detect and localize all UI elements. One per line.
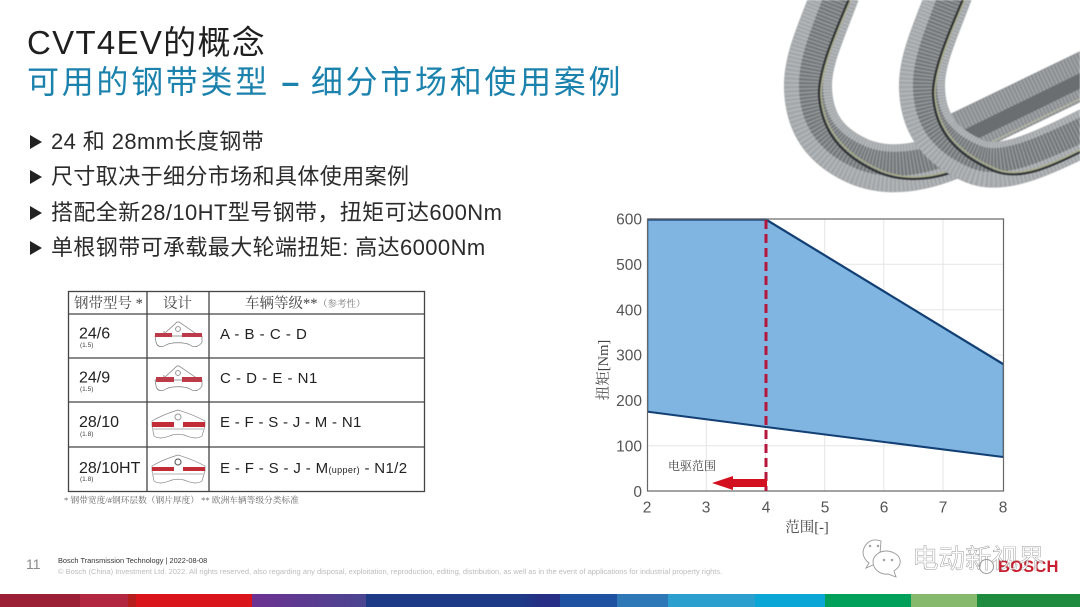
row 24/9: C - D - E - N1 (220, 370, 318, 387)
row 28/10: E - F - S - J - M - N1 (220, 414, 362, 431)
belt: right loop upper strand (945, 72, 1080, 160)
title: CVT4EV的概念 (27, 24, 266, 61)
x axis labels: 7 (939, 500, 947, 516)
bullet list: 24 和 28mm长度钢带 (51, 129, 264, 154)
y axis labels: 300 (616, 348, 642, 364)
x axis labels: 2 (643, 500, 651, 516)
y axis labels: 200 (616, 393, 642, 410)
y axis labels (616, 212, 642, 501)
y axis labels: 600 (616, 212, 642, 228)
row 24/6: (1.5) (80, 342, 93, 349)
footer title: Bosch Transmission Technology | 2022-08-08 (58, 556, 207, 565)
table header: 钢带型号 * (74, 294, 143, 312)
chart upper limit line (648, 220, 1003, 364)
row 24/6: 24/6 (79, 326, 110, 342)
image: CVT steel belts (783, 0, 1080, 193)
x axis labels: 6 (880, 500, 888, 516)
row 24/6 (79, 326, 307, 349)
watermark circle (979, 559, 994, 574)
chart frame (648, 219, 1004, 491)
row 28/10: 28/10 (79, 414, 119, 431)
row 28/10HT (79, 460, 407, 483)
row 24/9 (79, 370, 318, 393)
row 24/9: 24/9 (79, 370, 110, 386)
row 28/10: (1.8) (80, 431, 93, 438)
table grid (68, 291, 424, 492)
chart area: operating range (648, 219, 1003, 457)
bullet 4 (30, 235, 486, 260)
subtitle: 可用的钢带类型 – 细分市场和使用案例 (27, 64, 623, 100)
label: electric drive range: 电驱范围 (668, 458, 716, 473)
y axis title: 扭矩[Nm] (595, 340, 612, 400)
footer colour band (0, 594, 1080, 607)
bullet 3 (30, 200, 502, 225)
chart lower limit line (648, 412, 1003, 457)
bullet list: 单根钢带可承载最大轮端扭矩: 高达6000Nm (51, 235, 486, 260)
x axis title: 范围[-] (785, 518, 829, 536)
bullet list: 搭配全新28/10HT型号钢带，扭矩可达600Nm (51, 200, 502, 225)
table header: 车辆等级** (245, 295, 318, 312)
belt: right loop (922, 0, 1080, 174)
table header: 设计 (163, 295, 192, 312)
bullet list (30, 129, 502, 260)
y axis labels: 100 (616, 438, 642, 456)
table footnote: * 钢带宽度/#钢环层数（钢片厚度） ** 欧洲车辆等级分类标准 (64, 494, 299, 505)
logo: BOSCH: BOSCH (998, 558, 1059, 576)
bullet 2 (30, 164, 409, 189)
y axis labels: 400 (616, 302, 642, 320)
row 28/10HT: E - F - S - J - M(upper) - N1/2 (220, 460, 407, 477)
row 24/6: A - B - C - D (220, 326, 307, 343)
y axis labels: 0 (633, 484, 642, 501)
icon: belt section 28/10 (152, 410, 205, 438)
row 24/9: (1.5) (80, 386, 93, 393)
x axis labels (643, 500, 1007, 516)
watermark text: 电动新视界 (912, 544, 1044, 574)
bullet list: 尺寸取决于细分市场和具体使用案例 (51, 164, 409, 189)
row 28/10 (79, 414, 362, 438)
bullet 1 (30, 129, 264, 154)
belt: left loop (808, 0, 950, 179)
chart red dashed limit (764, 220, 768, 491)
row 28/10HT: 28/10HT (79, 460, 141, 477)
icon: belt section 28/10HT (152, 455, 205, 483)
x axis labels: 5 (821, 500, 829, 516)
y axis labels: 500 (616, 257, 642, 274)
x axis labels: 3 (702, 500, 710, 516)
row 28/10HT: (1.8) (80, 476, 93, 483)
page number: 11 (26, 556, 41, 572)
icon: belt section 24/6 (155, 322, 202, 347)
arrow: electric drive range (712, 476, 767, 490)
x axis labels: 8 (999, 500, 1007, 516)
table header: （参考性） (318, 298, 366, 310)
table header (74, 294, 366, 312)
x axis labels: 4 (762, 500, 771, 516)
icon: belt section 24/9 (155, 366, 202, 391)
footer copyright: © Bosch (China) Investment Ltd. 2022. All rights reserved, also regarding any disposal, exploitation, reproduction, editing, distribution, as well as in the event of applications for industrial property rights. (58, 567, 722, 576)
